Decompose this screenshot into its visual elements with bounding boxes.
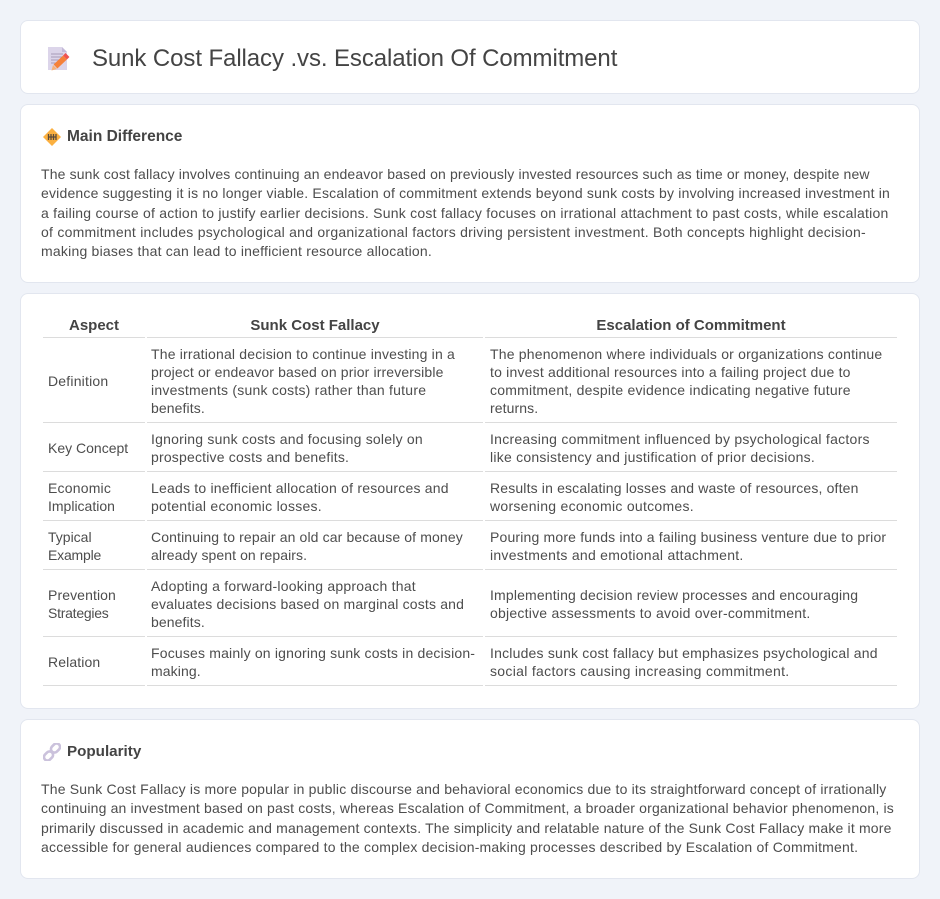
cell: sunk cost economic implication: Leads to inefficient allocation of resources and potential economic losses.: [151, 480, 449, 514]
cell: sunk cost relation: Focuses mainly on ignoring sunk costs in decision- making.: [151, 645, 475, 679]
icon: diamond sign: [43, 128, 61, 146]
heading: main difference: Main Difference: [67, 128, 182, 145]
panel: title: [20, 20, 920, 94]
title text: Sunk Cost Fallacy .vs. Escalation Of Commitment: [92, 45, 617, 72]
panel: popularity: [20, 719, 920, 879]
cell: escalation relation: Includes sunk cost fallacy but emphasizes psychological and social factors causing increasing commitment.: [490, 645, 878, 679]
text: main difference paragraph: The sunk cost fallacy involves continuing an endeavor based on previously invested resources such as time or money, despite new evidence suggesting it is no longer viable. Escalation of commitment extends beyond sunk costs by involving increased investment in a failing course of action to justify earlier decisions. Sunk cost fallacy focuses on irrational attachment to past costs, while escalation of commitment includes psychological and organizational factors driving persistent investment. Both concepts highlight decision- making biases that can lead to inefficient resource allocation.: [41, 166, 890, 259]
row label: key concept: Key Concept: [48, 440, 128, 456]
table header: aspect: Aspect: [69, 317, 119, 334]
cell: escalation definition: The phenomenon where individuals or organizations continue to invest additional resources into a failing project due to commitment, despite evidence indicating negative future returns.: [490, 346, 882, 416]
row label: relation: Relation: [48, 654, 100, 670]
icon: document with pencil: [48, 47, 70, 70]
cell: sunk cost example: Continuing to repair an old car because of money already spent on repairs.: [151, 529, 463, 563]
cell: sunk cost definition: The irrational decision to continue investing in a project or endeavor based on prior irreversible investments (sunk costs) rather than future benefits.: [151, 346, 455, 416]
cell: escalation prevention: Implementing decision review processes and encouraging objective assessments to avoid over-commitment.: [490, 587, 858, 621]
row label: typical example: Typical Example: [48, 529, 101, 563]
cell: escalation economic implication: Results in escalating losses and waste of resources, often worsening economic outcomes.: [490, 480, 859, 514]
table header: sunk cost fallacy: Sunk Cost Fallacy: [250, 317, 380, 334]
heading: popularity: Popularity: [67, 743, 141, 760]
cell: escalation key concept: Increasing commitment influenced by psychological factors like consistency and justification of prior decisions.: [490, 431, 870, 465]
row label: definition: Definition: [48, 373, 108, 389]
row label: economic implication: Economic Implication: [48, 480, 115, 514]
text: popularity paragraph: The Sunk Cost Fallacy is more popular in public discourse and behavioral economics due to its straightforward concept of irrationally continuing an investment based on past costs, whereas Escalation of Commitment, a broader organizational behavior phenomenon, is primarily discussed in academic and management contexts. The simplicity and relatable nature of the Sunk Cost Fallacy make it more accessible for general audiences compared to the complex decision-making processes described by Escalation of Commitment.: [41, 781, 894, 855]
cell: sunk cost key concept: Ignoring sunk costs and focusing solely on prospective costs and benefits.: [151, 431, 423, 465]
panel: main difference: [20, 104, 920, 283]
cell: sunk cost prevention: Adopting a forward-looking approach that evaluates decisions based on marginal costs and benefits.: [151, 578, 464, 630]
panel: comparison table: [20, 293, 920, 709]
table header: escalation of commitment: Escalation of Commitment: [596, 317, 786, 334]
row label: prevention strategies: Prevention Strategies: [48, 587, 116, 621]
icon: chain link: [43, 743, 61, 761]
cell: escalation example: Pouring more funds into a failing business venture due to prior investments and emotional attachment.: [490, 529, 886, 563]
